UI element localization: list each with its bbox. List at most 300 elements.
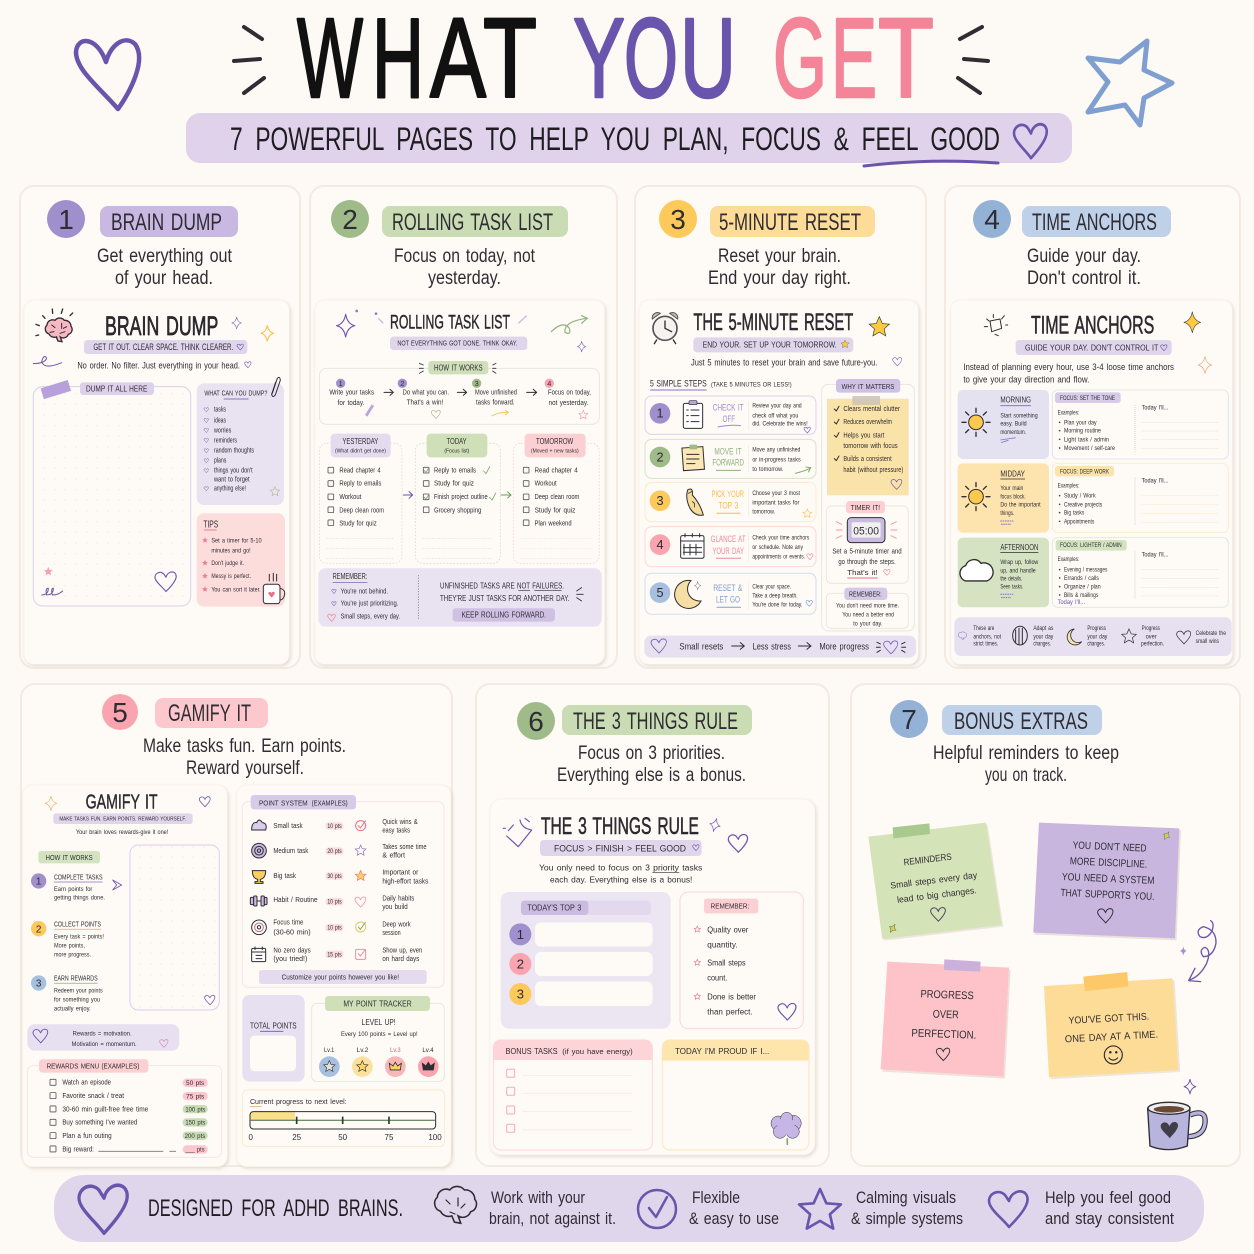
column: tomorrow: Study for quiz xyxy=(535,505,576,514)
note: reminders: REMINDERS xyxy=(903,852,952,867)
column: today: Finish project outline xyxy=(434,492,488,501)
progress bar: 100 xyxy=(428,1133,442,1142)
step 1: check off what you xyxy=(752,412,799,419)
row: afternoon: Bills & mailings xyxy=(1064,592,1098,599)
how it works: 1 xyxy=(339,379,343,388)
number badge 1: 1 xyxy=(58,204,74,235)
number badge 4: 4 xyxy=(984,204,1000,235)
number badge 7: 7 xyxy=(901,704,917,735)
my point tracker: Lv.1 xyxy=(324,1047,335,1054)
icon: green swirl arrow xyxy=(551,316,587,333)
note: reminders: Small steps every day xyxy=(890,870,978,891)
progress bar: 0 xyxy=(248,1133,253,1142)
point system: Medium task xyxy=(273,848,309,855)
remember box: Quality over xyxy=(707,924,748,934)
step 5: RESET & xyxy=(713,583,743,593)
row: afternoon: Organize / plan xyxy=(1064,584,1101,591)
remember band xyxy=(318,568,602,627)
step 2: to tomorrow. xyxy=(752,466,783,473)
point system: (30-60 min) xyxy=(273,929,311,936)
point system: you build xyxy=(382,904,408,911)
row: morning: Morning routine xyxy=(1064,428,1101,435)
bonus tasks xyxy=(493,1040,652,1150)
sticky note: why it matters: tomorrow with focus xyxy=(843,443,898,450)
row: morning: FOCUS: SET THE TONE xyxy=(1060,395,1115,402)
point reward icons xyxy=(355,821,366,959)
footer band xyxy=(54,1175,1204,1242)
step: earn rewards xyxy=(31,975,103,1012)
title: GAMIFY IT xyxy=(86,790,158,813)
step: earn rewards: EARN REWARDS xyxy=(54,975,98,982)
how it works: HOW IT WORKS xyxy=(434,363,483,372)
tagline xyxy=(84,340,247,354)
my point tracker: Every 100 points = Level up! xyxy=(341,1031,418,1038)
step: collect points: More points, xyxy=(54,943,85,950)
what can you dump box: plans xyxy=(214,458,227,465)
row: midday: Examples: xyxy=(1058,483,1079,490)
progress bar: 25 xyxy=(292,1133,302,1142)
tips box xyxy=(197,513,285,607)
heading xyxy=(1022,206,1171,237)
what can you dump box: tasks xyxy=(214,407,226,414)
note: you've got this xyxy=(1044,972,1180,1079)
panel: 5 gamify it xyxy=(21,684,452,1167)
rewards menu: 100 pts xyxy=(185,1106,205,1113)
row: midday: Your main xyxy=(1000,485,1024,492)
intro text: You only need to focus on 3 priority tasks xyxy=(539,863,702,873)
timer box: That's it! xyxy=(847,568,878,577)
how it works: Focus on today, xyxy=(548,387,591,396)
step 2: or in-progress tasks xyxy=(752,456,801,463)
point system: Deep work xyxy=(382,921,411,928)
how it works: That's a win! xyxy=(407,397,443,406)
heading: GAMIFY IT xyxy=(168,700,251,727)
step 1: did. Celebrate the wins! xyxy=(752,421,808,428)
point system xyxy=(242,795,444,987)
row: morning: Start something xyxy=(1000,412,1038,419)
description xyxy=(1027,246,1141,289)
column: tomorrow: Read chapter 4 xyxy=(535,465,578,474)
column: today xyxy=(415,434,500,563)
row: midday: Creative projects xyxy=(1064,501,1102,508)
step: earn rewards: 3 xyxy=(36,979,42,990)
note: discipline: YOU NEED A SYSTEM xyxy=(1062,872,1155,887)
bottom band: changes. xyxy=(1033,641,1051,648)
title: BRAIN DUMP xyxy=(105,311,218,341)
note: discipline xyxy=(1033,823,1181,940)
dump box xyxy=(33,380,191,606)
intro text: to give your day direction and flow. xyxy=(963,374,1089,384)
rewards menu: Plan a fun outing xyxy=(62,1133,112,1140)
row: midday: FOCUS: DEEP WORK xyxy=(1060,468,1109,475)
remember band: THEY'RE JUST TASKS FOR ANOTHER DAY. xyxy=(440,593,569,603)
note: reminders xyxy=(868,823,1003,941)
step: complete tasks: 1 xyxy=(36,877,42,888)
row: morning: Examples: xyxy=(1058,409,1079,416)
description: yesterday. xyxy=(428,268,501,289)
row: afternoon: Evening / messages xyxy=(1064,567,1107,574)
total points: TOTAL POINTS xyxy=(250,1021,297,1030)
planner sheet: brain dump xyxy=(24,300,289,664)
remember box: than perfect. xyxy=(707,1006,753,1016)
sticky note: why it matters: Builds a consistent xyxy=(843,456,892,463)
remember box: Done is better xyxy=(707,991,756,1001)
bottom band: More progress xyxy=(819,641,869,651)
what can you dump box xyxy=(197,377,284,505)
bottom band: changes. xyxy=(1087,641,1105,648)
column: today: (Focus list) xyxy=(444,449,469,455)
timer box: 05:00 xyxy=(853,526,879,538)
column: tomorrow: Plan weekend xyxy=(535,518,572,527)
step: complete tasks: getting things done. xyxy=(54,895,105,902)
rewards menu: REWARDS MENU (EXAMPLES) xyxy=(47,1062,139,1071)
step 2 xyxy=(645,439,816,478)
heading: THE 3 THINGS RULE xyxy=(573,708,738,735)
step: complete tasks xyxy=(31,873,122,902)
today's top 3: 1 xyxy=(517,927,524,942)
heading: 5-MINUTE RESET xyxy=(719,209,861,236)
tagline xyxy=(1016,340,1172,355)
doodle xyxy=(33,356,62,366)
intro text xyxy=(539,863,702,885)
planner sheet: gamify right xyxy=(237,785,451,1167)
column: yesterday xyxy=(319,434,402,563)
step 4: or schedule. Note any xyxy=(752,544,803,551)
step 4: 4 xyxy=(656,538,664,552)
sparkles xyxy=(1180,947,1196,1094)
today's top 3: 3 xyxy=(517,987,524,1002)
row: afternoon: FOCUS: LIGHTER / ADMIN xyxy=(1060,542,1122,549)
planner sheet: time anchors xyxy=(951,300,1232,664)
icon: brain xyxy=(36,309,73,342)
step 1: Review your day and xyxy=(752,403,802,410)
tagline: GET IT OUT. CLEAR SPACE. THINK CLEARER. xyxy=(93,342,233,352)
how it works: Write your tasks xyxy=(329,387,374,396)
description: you on track. xyxy=(985,765,1067,786)
bottom band: These are xyxy=(973,625,995,632)
header xyxy=(76,0,1172,166)
step 5: Take a deep breath. xyxy=(752,592,798,599)
footer item: star: Calming visuals xyxy=(856,1188,956,1207)
icon: flower xyxy=(771,1112,801,1145)
remember box: to your day. xyxy=(853,621,883,627)
rewards menu: 30-60 min guilt-free free time xyxy=(62,1106,148,1113)
tagline: END YOUR. SET UP YOUR TOMORROW. xyxy=(703,340,837,350)
note: discipline: THAT SUPPORTS YOU. xyxy=(1060,888,1155,903)
point system: on hard days xyxy=(382,956,420,963)
heading xyxy=(942,705,1102,735)
column: yesterday: Read chapter 4 xyxy=(339,465,381,474)
number badge 6: 6 xyxy=(528,706,544,737)
timer box: Set a 5-minute timer and xyxy=(832,546,902,555)
heading: BRAIN DUMP xyxy=(111,209,222,236)
how it works: for today. xyxy=(338,398,364,407)
column: yesterday: (What didn't get done) xyxy=(335,449,386,455)
arrow to tomorrow xyxy=(501,492,511,498)
tagline: MAKE TASKS FUN. EARN POINTS. REWARD YOURSELF. xyxy=(59,817,186,823)
step 1: OFF xyxy=(723,414,735,424)
row: afternoon: the details. xyxy=(1000,576,1022,583)
sticky note: why it matters: habit (without pressure) xyxy=(843,467,903,474)
number badge 7 xyxy=(890,700,928,738)
remember box: REMEMBER: xyxy=(849,590,882,599)
row: afternoon: Examples: xyxy=(1058,556,1079,563)
icon: sketch sun xyxy=(984,314,1008,336)
right column xyxy=(822,379,914,631)
today I'm proud xyxy=(662,1040,809,1150)
tagline: NOT EVERYTHING GOT DONE. THINK OKAY. xyxy=(397,339,517,348)
description: Guide your day. xyxy=(1027,246,1141,267)
row: afternoon: up, and handle xyxy=(1000,567,1036,574)
icon: smiley xyxy=(1104,1046,1122,1064)
footer item: star xyxy=(799,1188,963,1229)
my point tracker: Lv.2 xyxy=(357,1047,369,1054)
step: earn rewards: Redeem your points xyxy=(54,988,103,995)
footer heading: DESIGNED FOR ADHD BRAINS. xyxy=(148,1195,403,1222)
step 5: Clear your space. xyxy=(752,583,791,590)
row: afternoon: Today I'll... xyxy=(1142,552,1169,559)
sticky notes group xyxy=(868,823,1216,1150)
sticky note: why it matters xyxy=(827,396,908,495)
timer box: TIMER IT! xyxy=(851,503,880,512)
how it works xyxy=(319,361,599,424)
point system: session xyxy=(382,930,401,937)
number badge 3 xyxy=(659,200,697,238)
point system: Big task xyxy=(273,873,296,880)
title: THE 3 THINGS RULE xyxy=(541,813,699,840)
point system: (you tried!) xyxy=(273,956,307,963)
point system: 30 pts xyxy=(327,874,342,880)
what can you dump box: random thoughts xyxy=(214,448,254,455)
panel: 3 five-minute reset xyxy=(635,186,926,668)
heading xyxy=(155,698,268,728)
step 2: Move any unfinished xyxy=(752,447,801,454)
steps heading: (TAKE 5 MINUTES OR LESS!) xyxy=(711,382,792,389)
tips box: Don't judge it. xyxy=(211,560,244,567)
tagline xyxy=(390,337,527,350)
how it works: tasks forward. xyxy=(476,397,515,406)
heading: ROLLING TASK LIST xyxy=(392,209,553,236)
point system: 20 pts xyxy=(327,849,342,855)
planner sheet: gamify left xyxy=(23,785,227,1167)
row: morning: Today I'll... xyxy=(1142,404,1169,411)
note: progress over perfection: PERFECTION. xyxy=(911,1027,977,1042)
panel: 6 three things rule xyxy=(476,684,829,1166)
point system: Customize your points however you like! xyxy=(282,974,399,981)
number badge 6 xyxy=(517,702,555,740)
step: earn rewards: actually enjoy. xyxy=(54,1005,91,1012)
note: discipline: MORE DISCIPLINE. xyxy=(1070,856,1147,871)
total points xyxy=(242,995,305,1082)
column: yesterday: Reply to emails xyxy=(339,479,382,488)
step 5: LET GO xyxy=(716,595,740,605)
point system: & effort xyxy=(382,853,405,860)
row: morning: Light task / admin xyxy=(1064,436,1109,443)
rewards menu: 150 pts xyxy=(185,1120,205,1127)
number badge 2: 2 xyxy=(342,204,358,235)
row: midday: Do the important xyxy=(1000,502,1041,509)
row: afternoon: Today I'll... xyxy=(1058,599,1085,606)
rewards menu: 50 pts xyxy=(186,1080,204,1087)
description xyxy=(557,743,746,786)
what can you dump box: worries xyxy=(213,427,232,434)
my point tracker: Lv.3 xyxy=(390,1047,401,1054)
planner sheet: five-minute reset xyxy=(639,300,918,664)
note: progress over perfection: OVER xyxy=(933,1009,959,1021)
step: collect points: Every task = points! xyxy=(54,933,104,940)
description: Get everything out xyxy=(97,246,233,267)
description xyxy=(143,736,346,779)
number badge 4 xyxy=(973,200,1011,238)
point system: Daily habits xyxy=(382,895,415,902)
arrow to today xyxy=(403,492,413,498)
footer item: check xyxy=(638,1188,779,1228)
sparkles xyxy=(1184,312,1212,374)
remember band: KEEP ROLLING FORWARD. xyxy=(462,610,546,620)
my point tracker xyxy=(312,996,444,1082)
remember box: You don't need more time. xyxy=(836,604,899,610)
tagline: GUIDE YOUR DAY. DON'T CONTROL IT xyxy=(1025,342,1159,352)
rewards menu: ___ pts xyxy=(184,1147,205,1154)
how it works: 2 xyxy=(400,379,404,388)
point system: 10 pts xyxy=(327,900,342,906)
progress bar: Current progress to next level: xyxy=(250,1099,347,1106)
today's top 3: TODAY'S TOP 3 xyxy=(527,904,582,913)
description xyxy=(708,246,851,289)
icon: blue star xyxy=(1088,41,1172,125)
tips box: TIPS xyxy=(203,519,219,530)
bottom band: anchors, not xyxy=(973,633,1001,640)
description: End your day right. xyxy=(708,268,851,289)
what can you dump box: things you don't xyxy=(214,468,253,475)
row: midday: focus block. xyxy=(1000,493,1026,500)
title: ROLLING TASK LIST xyxy=(390,312,510,333)
note: reminders: lead to big changes. xyxy=(897,885,977,905)
step 2: MOVE IT xyxy=(714,446,742,456)
rewards menu: 75 pts xyxy=(186,1093,204,1100)
my point tracker: LEVEL UP! xyxy=(362,1017,396,1027)
bottom band: Less stress xyxy=(753,641,791,651)
footer item: check: Flexible xyxy=(692,1188,740,1207)
remember band: UNFINISHED TASKS ARE NOT FAILURES. xyxy=(440,580,564,590)
number badge 2 xyxy=(331,200,369,238)
footer item: brain: brain, not against it. xyxy=(489,1209,616,1228)
motivation band: Motivation = momentum. xyxy=(72,1041,137,1048)
panel: 7 bonus extras xyxy=(851,684,1240,1166)
note: discipline: YOU DON'T NEED xyxy=(1072,840,1147,855)
remember box: REMEMBER: xyxy=(711,901,749,910)
number badge 5 xyxy=(102,694,138,730)
step 3: tomorrow. xyxy=(752,509,775,516)
row: midday: MIDDAY xyxy=(1000,469,1026,478)
footer item: brain xyxy=(435,1186,616,1228)
description xyxy=(394,246,536,289)
remember band: You're not behind. xyxy=(341,586,388,595)
point icons xyxy=(250,820,267,962)
column: yesterday: YESTERDAY xyxy=(342,437,379,446)
sparkles xyxy=(45,796,210,811)
bonus tasks: BONUS TASKS xyxy=(506,1047,558,1056)
column: today: Reply to emails xyxy=(434,465,476,474)
row: morning xyxy=(958,390,1228,459)
description: Reset your brain. xyxy=(718,246,841,267)
tips box: Set a timer for 5-10 xyxy=(211,537,262,544)
title: TIME ANCHORS xyxy=(1031,311,1154,339)
step 4: Check your time anchors xyxy=(752,534,810,541)
timer box: go through the steps. xyxy=(838,557,896,566)
tips box: Messy is perfect. xyxy=(211,573,251,580)
footer item: check: & easy to use xyxy=(689,1209,779,1228)
remember band: You're just prioritizing. xyxy=(341,599,398,608)
today's top 3 xyxy=(501,892,671,1029)
bottom band: Progress xyxy=(1142,625,1160,632)
sticky note: why it matters: Reduces overwhelm xyxy=(843,419,892,426)
bottom band: perfection. xyxy=(1141,641,1164,648)
step 3: 3 xyxy=(656,494,664,508)
row: midday: Study / Work xyxy=(1064,493,1096,500)
rewards menu: 200 pts xyxy=(185,1133,205,1140)
step: collect points: 2 xyxy=(36,924,42,935)
doodle arrow xyxy=(1189,921,1216,982)
step: earn rewards: for something you xyxy=(54,997,100,1004)
progress bar: 50 xyxy=(338,1133,348,1142)
progress bar xyxy=(242,1090,445,1147)
how it works tab xyxy=(38,851,100,863)
description: Helpful reminders to keep xyxy=(933,743,1119,764)
point system: Habit / Routine xyxy=(273,897,318,904)
footer item: heart: Help you feel good xyxy=(1045,1188,1171,1207)
doodles xyxy=(708,817,748,852)
intro text xyxy=(963,362,1174,384)
remember box: quantity. xyxy=(707,939,738,949)
remember box: Small steps xyxy=(707,958,746,968)
motivation band xyxy=(27,1024,179,1051)
row: afternoon: Errands / calls xyxy=(1064,575,1099,582)
point system: easy tasks xyxy=(382,828,410,835)
bottom band: Small resets xyxy=(679,641,724,651)
today I'm proud: TODAY I'M PROUD IF I... xyxy=(675,1047,769,1056)
timer box xyxy=(826,501,908,583)
step 1 xyxy=(645,396,816,434)
step: collect points xyxy=(31,921,104,959)
sticky note: why it matters: Helps you start xyxy=(843,432,884,439)
step 4 xyxy=(645,527,816,567)
what can you dump box: want to forget xyxy=(213,476,250,483)
icon: yellow star xyxy=(869,317,889,336)
step 2: 2 xyxy=(656,450,664,464)
intro text: Instead of planning every hour, use 3-4 loose time anchors xyxy=(963,362,1174,372)
sparkle doodle xyxy=(503,818,532,847)
sparkles xyxy=(232,317,274,341)
panel: 2 rolling task list xyxy=(310,186,617,668)
description xyxy=(97,246,233,289)
what can you dump box: WHAT CAN YOU DUMP? xyxy=(204,389,267,398)
step: collect points: more progress. xyxy=(54,952,91,959)
column: today: Study for quiz xyxy=(434,479,474,488)
bonus tasks: (if you have energy) xyxy=(562,1047,633,1056)
step: complete tasks: Earn points for xyxy=(54,886,93,893)
description: Everything else is a bonus. xyxy=(557,765,746,786)
title: THE 5-MINUTE RESET xyxy=(693,309,854,336)
description: of your head. xyxy=(115,268,213,289)
rays left xyxy=(234,27,264,93)
motivation band: Rewards = motivation. xyxy=(73,1031,132,1038)
bottom band: Progress xyxy=(1087,625,1106,632)
column: today: TODAY xyxy=(447,437,467,446)
rewards menu xyxy=(27,1059,222,1157)
footer item: star: & simple systems xyxy=(851,1209,963,1228)
row: afternoon xyxy=(958,538,1228,607)
